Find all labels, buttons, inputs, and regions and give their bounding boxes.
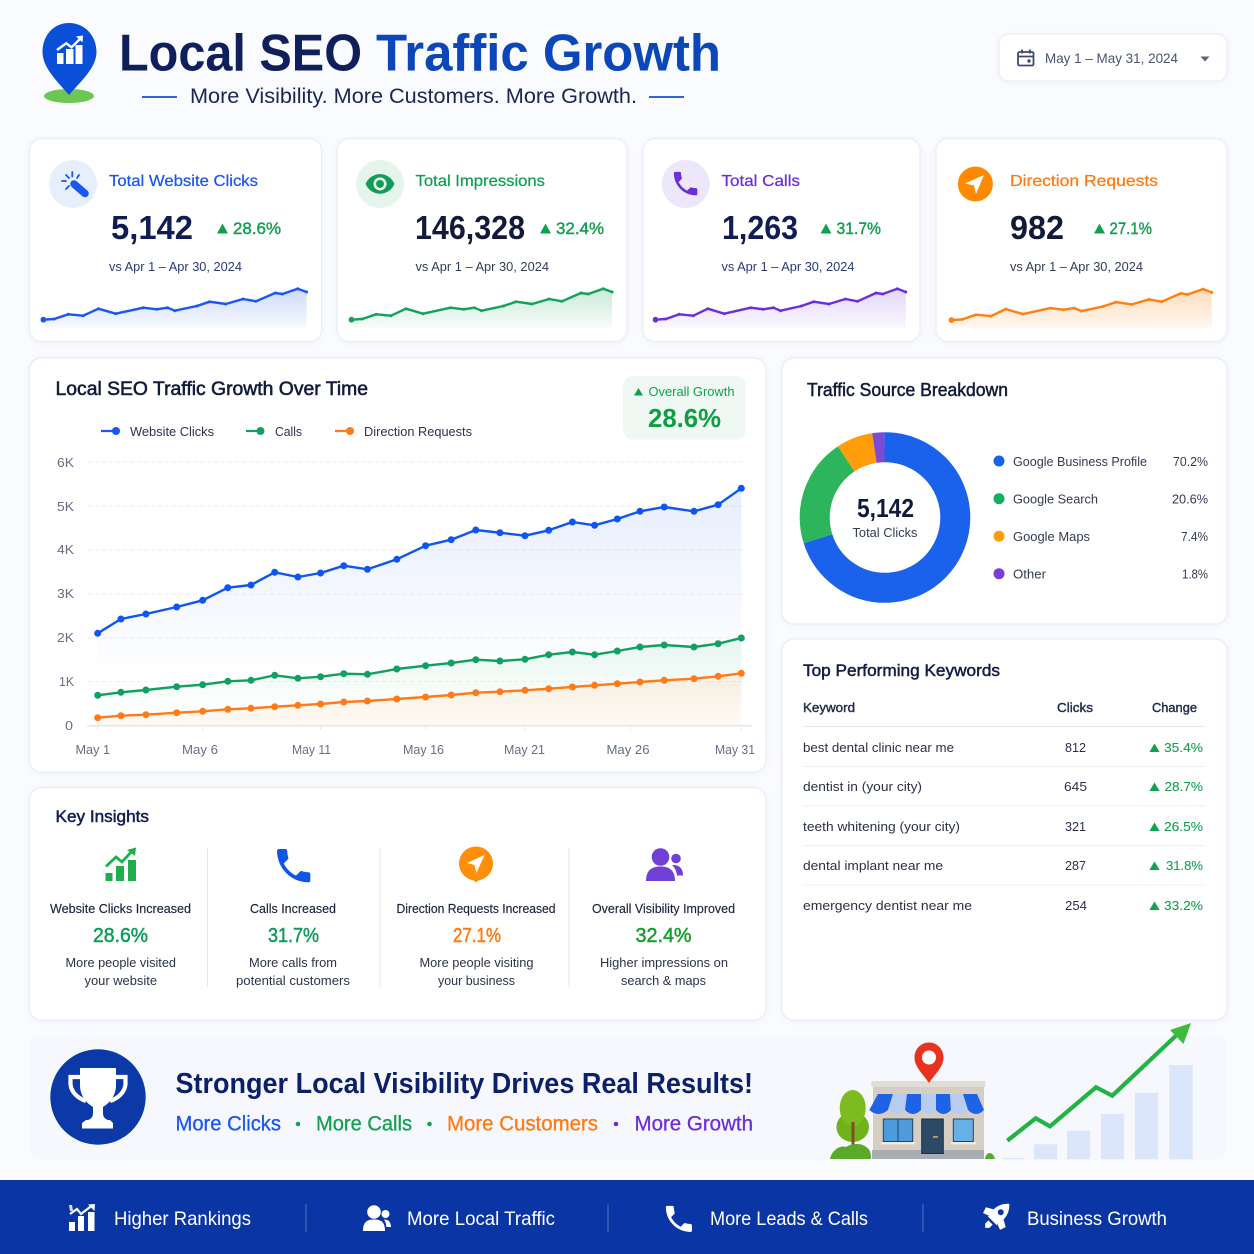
footer item: more local traffic: More Local Traffic <box>407 1208 555 1230</box>
footer item: more leads and calls <box>666 1206 868 1232</box>
donut chart: Total Clicks <box>852 525 918 540</box>
legend: Website Clicks <box>130 424 214 439</box>
table rows: 28.7% <box>1164 779 1203 794</box>
banner benefits: More Growth <box>634 1112 753 1136</box>
table rows: 321 <box>1065 819 1086 834</box>
KPI change: 32.4% <box>556 219 604 238</box>
icon: rocket <box>975 1194 1019 1238</box>
callout: overall growth: Overall Growth <box>648 384 734 399</box>
insight: website clicks increased: 28.6% <box>93 925 148 947</box>
table rows: 645 <box>1064 779 1087 794</box>
KPI value: 982 <box>1010 209 1064 246</box>
KPI label: Total Website Clicks <box>109 173 258 190</box>
panel: key insights <box>30 788 766 1020</box>
x axis labels <box>76 726 755 757</box>
insight: website clicks increased: Website Clicks Increased <box>50 902 191 916</box>
table rows: 812 <box>1065 740 1086 755</box>
icon: blue phone <box>277 849 310 882</box>
x axis labels: May 11 <box>292 742 331 757</box>
footer bar <box>0 1180 1254 1254</box>
KPI value: 5,142 <box>111 209 193 246</box>
comparison period: vs Apr 1 – Apr 30, 2024 <box>109 259 242 274</box>
illustration: growth bars and arrow <box>1003 1023 1193 1159</box>
sparkline <box>952 289 1212 328</box>
KPI label: Total Calls <box>722 173 800 190</box>
callout: overall growth: 28.6% <box>648 403 721 433</box>
KPI value: 146,328 <box>415 209 525 246</box>
insight: calls increased: 31.7% <box>268 925 319 947</box>
insight: calls increased: More calls from <box>249 955 337 970</box>
insight: overall visibility improved: search & maps <box>621 973 706 988</box>
table rows: dental implant near me <box>803 858 943 873</box>
donut legend: Google Maps <box>1013 529 1090 544</box>
building <box>869 1081 985 1159</box>
callout: overall growth <box>623 376 746 440</box>
insight: direction requests increased <box>396 846 556 988</box>
icon: rising bars <box>106 848 136 881</box>
insight: calls increased: potential customers <box>236 973 350 988</box>
panel heading: Key Insights <box>56 807 149 826</box>
y axis labels and gridlines: 2K <box>57 630 74 645</box>
x axis labels: May 21 <box>504 742 545 757</box>
sparkline <box>352 289 612 328</box>
icon: location pin logo with chart <box>42 23 96 103</box>
table rows: 33.2% <box>1164 898 1203 913</box>
subtitle: More Visibility. More Customers. More Growth. <box>190 85 637 108</box>
banner benefits: More Clicks <box>176 1112 281 1136</box>
table header <box>803 700 1205 885</box>
insight: direction requests increased: 27.1% <box>453 925 501 947</box>
banner benefits: More Customers <box>447 1112 598 1136</box>
insight: direction requests increased: More people visiting <box>420 955 534 970</box>
KPI label: Direction Requests <box>1010 173 1158 190</box>
insight: overall visibility improved: Overall Visibility Improved <box>592 902 735 916</box>
banner benefits: More Calls <box>316 1112 412 1136</box>
KPI change <box>820 219 881 238</box>
donut legend: Google Search <box>1013 492 1098 506</box>
icon: phone <box>666 1206 692 1232</box>
y axis labels and gridlines: 4K <box>57 542 74 557</box>
donut legend: Other <box>1013 566 1047 582</box>
table rows: 35.4% <box>1164 740 1203 755</box>
y axis labels and gridlines: 3K <box>57 586 74 601</box>
donut legend: 7.4% <box>1181 529 1208 544</box>
series: website clicks <box>98 488 741 726</box>
footer item: more leads and calls: More Leads & Calls <box>710 1208 868 1230</box>
table rows: 31.8% <box>1166 858 1203 873</box>
insight: website clicks increased: More people visited <box>66 955 176 970</box>
insight: calls increased <box>236 849 350 988</box>
tree and shrubs <box>830 1090 995 1159</box>
KPI value: 1,263 <box>722 209 798 246</box>
legend: Calls <box>275 424 302 439</box>
donut legend: 20.6% <box>1172 492 1208 506</box>
panel: top performing keywords <box>782 639 1227 1020</box>
icon: calendar <box>1018 50 1034 66</box>
title: Local SEO <box>119 24 362 82</box>
date range selector: May 1 – May 31, 2024 <box>1045 50 1178 66</box>
header: logo, title and subtitle <box>42 23 721 108</box>
y axis labels and gridlines: 0 <box>65 718 73 733</box>
table rows: 254 <box>1065 898 1087 913</box>
footer item: business growth <box>975 1194 1167 1238</box>
KPI change: 28.6% <box>233 219 281 238</box>
comparison period: vs Apr 1 – Apr 30, 2024 <box>416 259 549 274</box>
icon: navigation arrow <box>958 166 993 202</box>
table header: Change <box>1152 700 1197 715</box>
icon: trophy <box>50 1049 146 1145</box>
KPI label: Total Impressions <box>416 173 545 190</box>
donut chart <box>815 447 955 588</box>
x axis labels: May 16 <box>403 742 444 757</box>
legend: Direction Requests <box>364 424 472 439</box>
KPI card: direction requests <box>936 138 1227 342</box>
panel heading: Traffic Source Breakdown <box>807 380 1008 400</box>
donut chart: 5,142 <box>857 493 914 523</box>
series: calls <box>98 638 741 726</box>
legend <box>101 424 472 439</box>
x axis labels: May 1 <box>76 742 110 757</box>
insight: overall visibility improved: Higher impressions on <box>600 955 728 970</box>
x axis labels: May 6 <box>182 742 218 757</box>
icon: red map pin <box>914 1042 944 1083</box>
table rows: best dental clinic near me <box>803 740 954 755</box>
x axis labels: May 26 <box>606 742 650 757</box>
KPI card: total impressions <box>337 138 627 342</box>
insight: website clicks increased: your website <box>84 973 157 988</box>
icon: phone <box>662 160 710 208</box>
icon: eye <box>356 160 404 208</box>
banner: stronger local visibility <box>29 1023 1227 1160</box>
donut legend: 1.8% <box>1182 566 1208 582</box>
table rows: 287 <box>1065 858 1086 873</box>
panel: traffic source breakdown <box>782 358 1227 624</box>
donut legend <box>994 454 1208 582</box>
donut legend: Google Business Profile <box>1013 454 1147 469</box>
KPI card: total website clicks <box>30 138 322 342</box>
icon: rising chart <box>69 1204 95 1231</box>
table rows: emergency dentist near me <box>803 898 972 913</box>
y axis labels and gridlines <box>57 455 752 733</box>
footer item: higher rankings <box>69 1204 251 1231</box>
sparkline <box>656 289 906 328</box>
icon: orange navigation pin <box>459 846 493 882</box>
table header: Keyword <box>803 700 855 715</box>
KPI change: 31.7% <box>836 219 881 238</box>
awning <box>869 1094 984 1114</box>
banner benefits <box>176 1112 753 1136</box>
icon: people <box>363 1205 391 1231</box>
insight: overall visibility improved <box>592 848 735 988</box>
KPI change <box>1094 219 1152 238</box>
footer item: higher rankings: Higher Rankings <box>114 1208 251 1230</box>
insight: overall visibility improved: 32.4% <box>636 925 692 947</box>
insight: direction requests increased: Direction Requests Increased <box>396 902 556 916</box>
banner headline: Stronger Local Visibility Drives Real Results! <box>176 1068 753 1100</box>
sparkline <box>43 289 307 328</box>
title: Traffic Growth <box>376 24 721 82</box>
comparison period: vs Apr 1 – Apr 30, 2024 <box>1010 259 1143 274</box>
table header: Clicks <box>1057 700 1094 715</box>
KPI change: 27.1% <box>1110 219 1152 238</box>
x axis labels: May 31 <box>715 742 755 757</box>
KPI card: total calls <box>643 138 920 342</box>
table rows <box>803 740 1203 913</box>
chart heading: Local SEO Traffic Growth Over Time <box>56 379 368 400</box>
date range selector <box>999 34 1227 81</box>
footer item: business growth: Business Growth <box>1027 1208 1167 1230</box>
table rows: 26.5% <box>1164 819 1203 834</box>
panel: traffic growth line chart <box>30 358 766 772</box>
y axis labels and gridlines: 5K <box>57 499 74 514</box>
y axis labels and gridlines: 1K <box>59 674 74 689</box>
insight: calls increased: Calls Increased <box>250 902 336 916</box>
panel heading: Top Performing Keywords <box>803 661 1000 680</box>
comparison period: vs Apr 1 – Apr 30, 2024 <box>722 259 854 274</box>
table rows: dentist in (your city) <box>803 779 922 794</box>
illustration: storefront with pin <box>830 1042 995 1159</box>
insight: website clicks increased <box>50 848 191 988</box>
series: direction requests <box>98 673 741 726</box>
donut legend: 70.2% <box>1173 454 1208 469</box>
y axis labels and gridlines: 6K <box>57 455 74 470</box>
icon: people <box>646 848 683 881</box>
icon: click pointer <box>49 160 97 208</box>
table rows: teeth whitening (your city) <box>803 819 960 834</box>
insight: direction requests increased: your business <box>438 973 515 988</box>
footer item: more local traffic <box>363 1205 555 1231</box>
